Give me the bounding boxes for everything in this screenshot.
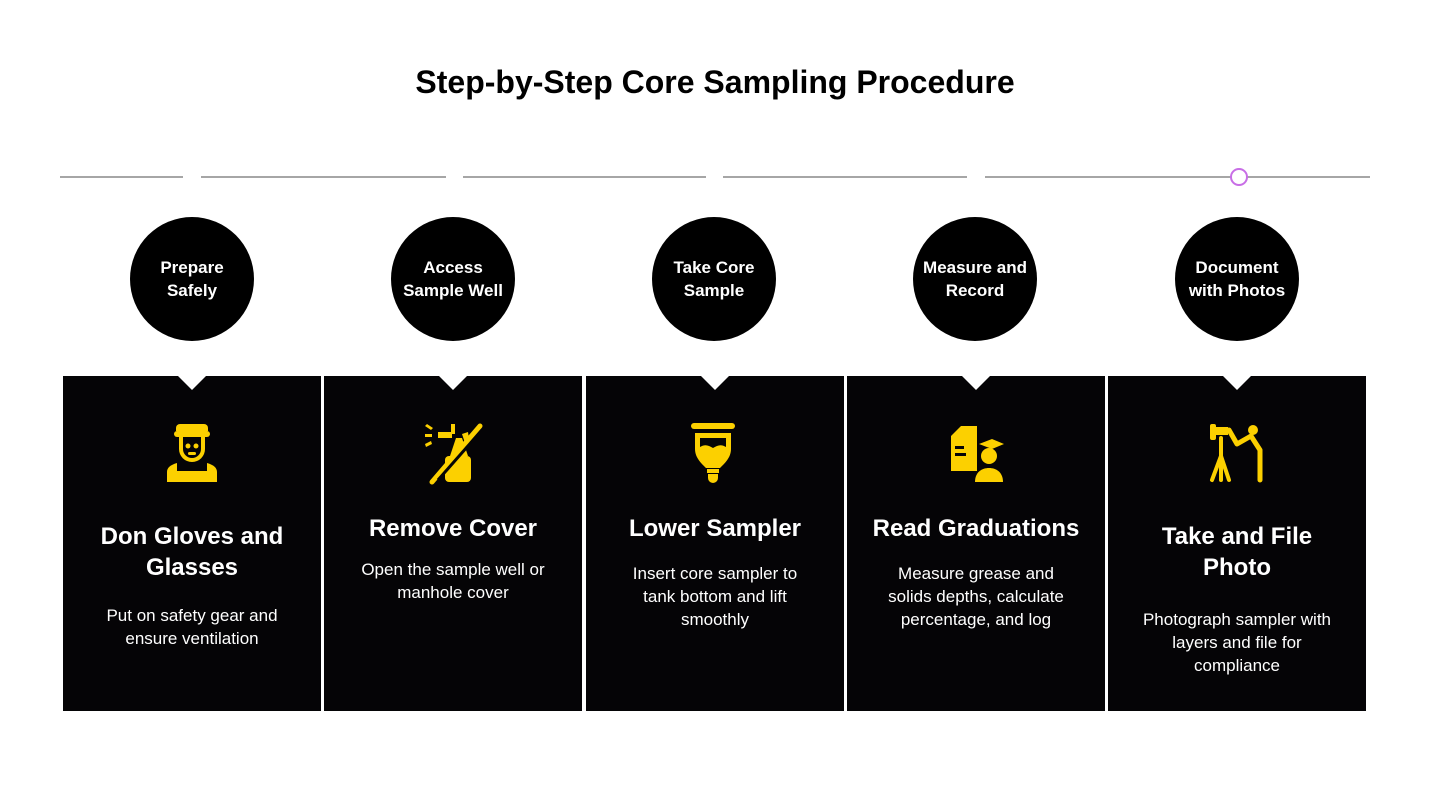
description: Open the sample well or manhole cover — [361, 560, 545, 602]
step circle 1: Prepare — [160, 258, 224, 277]
panel: don gloves — [63, 376, 321, 711]
heading: Don Gloves and — [101, 523, 283, 550]
heading: Remove Cover — [369, 515, 537, 542]
step circle 2 — [391, 217, 515, 341]
icon: worker — [167, 424, 217, 482]
description: Put on safety gear and ensure ventilation — [106, 606, 278, 648]
step circle 1 — [130, 217, 254, 341]
step circle 4: Measure and — [923, 258, 1027, 277]
icon: no spray — [425, 424, 482, 484]
step circle 4 — [913, 217, 1037, 341]
step circle 3 — [652, 217, 776, 341]
panel: lower sampler — [586, 376, 844, 711]
step circle 2: Access — [423, 258, 483, 277]
heading: Glasses — [146, 554, 238, 581]
panel: remove cover — [324, 376, 582, 711]
description: Photograph sampler with layers and file for compliance — [1143, 610, 1331, 675]
panel: take photo — [1108, 376, 1366, 711]
icon: camera tripod — [1210, 424, 1262, 482]
heading — [101, 523, 283, 581]
step circle 5: Document — [1195, 258, 1279, 277]
heading: Read Graduations — [873, 515, 1079, 542]
step circle 3: Sample — [684, 281, 744, 300]
description: Insert core sampler to tank bottom and lift smoothly — [633, 564, 797, 629]
icon: sampler — [691, 423, 735, 483]
heading: Photo — [1203, 554, 1271, 581]
step circle 4: Record — [946, 281, 1004, 300]
description: Measure grease and solids depths, calculate percentage, and log — [888, 564, 1064, 629]
step circle 3: Take Core — [674, 258, 754, 277]
heading: Take and File — [1162, 523, 1312, 550]
icon: document and graduate — [951, 426, 1004, 482]
step circle 5 — [1175, 217, 1299, 341]
panel: read graduations — [847, 376, 1105, 711]
title: Step-by-Step Core Sampling Procedure — [415, 64, 1015, 100]
step circle 1: Safely — [167, 281, 217, 300]
heading — [1162, 523, 1312, 581]
timeline — [60, 168, 1370, 186]
heading: Lower Sampler — [629, 515, 801, 542]
step circle 5: with Photos — [1189, 281, 1285, 300]
timeline marker — [1230, 168, 1248, 186]
step circle 2: Sample Well — [403, 281, 503, 300]
